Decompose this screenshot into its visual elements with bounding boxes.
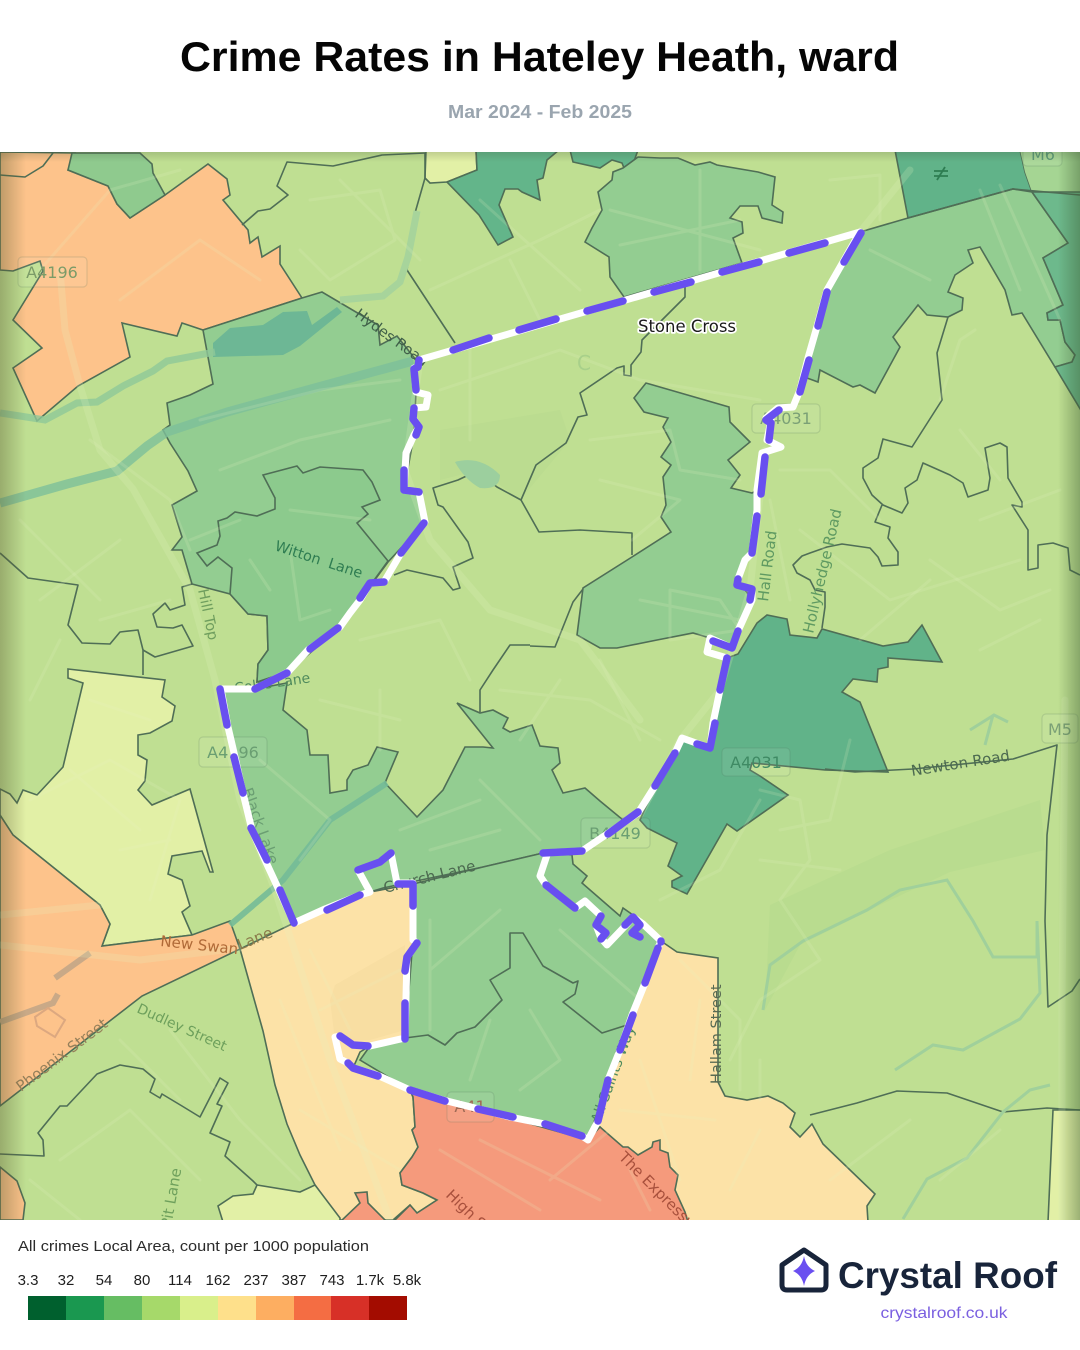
label: The Express: The Expressway [614, 1147, 714, 1247]
area: north-east mid green [807, 189, 1075, 393]
area: Witton north [163, 292, 425, 682]
chip: A4031 north: A4031 [760, 409, 812, 428]
label: Pit Lane: Pit Lane [157, 1167, 185, 1229]
area: salmon south [393, 1090, 688, 1222]
label: Coles Lane: Coles Lane [233, 670, 311, 697]
legend value labels: 3.3 [18, 1272, 38, 1289]
chip: A4196 south: A4196 [207, 743, 259, 762]
water: canals and lake [0, 211, 1050, 1219]
place label: Stone Cross: Stone Cross [638, 317, 736, 336]
chip: A4031 south: A4031 [730, 753, 782, 772]
chip: B4149 [581, 818, 650, 848]
ward boundary: Hateley Heath [220, 232, 861, 1140]
legend value labels: 54 [96, 1272, 112, 1289]
legend value labels: 32 [58, 1272, 74, 1289]
area: far-east darker green [1032, 192, 1080, 412]
brand name: Crystal Roof [838, 1255, 1058, 1296]
area: corner orange [0, 1167, 25, 1220]
area: north-east top mid [1020, 150, 1080, 192]
label: Hill Top: Hill Top [194, 588, 221, 642]
chip: B4149: B4149 [589, 824, 641, 843]
label: Dudley Street: Dudley Street [134, 1001, 229, 1055]
chip: A4196 north: A4196 [26, 263, 78, 282]
chip: A41 [447, 1092, 494, 1122]
area: central mid green [577, 383, 757, 648]
label: Church Lane: Church Lane [382, 857, 477, 897]
local-area boundary lines [0, 153, 1080, 1185]
area: top cream [425, 150, 477, 183]
label: Hydes Road: Hydes Road [352, 306, 431, 370]
label: All Saints Way: All Saints Way [589, 1023, 639, 1125]
label: Hall Road: Hall Road [754, 530, 781, 602]
label: Hollyhedge Road: Hollyhedge Road [799, 507, 845, 635]
map edge shading [0, 152, 1080, 1220]
chip: M5 [1042, 714, 1078, 743]
legend value labels: 162 [205, 1272, 231, 1289]
label: Phoenix Street: Phoenix Street [13, 1015, 111, 1095]
label: High Street: High Street [442, 1186, 516, 1258]
legend value labels [18, 1272, 422, 1289]
area: top mid green [585, 157, 783, 297]
area: south centre-west cream [240, 884, 437, 1220]
chip: A4196 south [199, 737, 267, 767]
choropleth areas [0, 150, 1080, 1222]
label: faint C: C [577, 351, 591, 375]
area: salmon small [340, 1192, 387, 1222]
label: Lane: Lane [235, 923, 275, 954]
area: north-east dark green [895, 150, 1032, 218]
park shading [765, 800, 1045, 1010]
title: Crime Rates in Hateley Heath, ward [180, 33, 899, 80]
chip: A41: A41 [454, 1097, 486, 1116]
area: pale south [218, 1185, 340, 1222]
label: Witton Lane: Witton Lane [273, 539, 364, 582]
chip: M6: M6 [1031, 145, 1055, 164]
railway station icon [934, 167, 948, 180]
legend [18, 1238, 422, 1320]
legend value labels: 1.7k [356, 1272, 385, 1289]
legend value labels: 5.8k [393, 1272, 422, 1289]
boundary: white casing [221, 232, 860, 1140]
label: Newton Road: Newton Road [910, 747, 1011, 780]
legend value labels: 237 [243, 1272, 269, 1289]
area: ward south mid green [360, 853, 661, 1140]
area: north-west orange [0, 152, 302, 421]
chip: M6 [1022, 152, 1062, 166]
area: ward south-west mid green [221, 683, 640, 923]
icon: house with star [782, 1250, 826, 1290]
area: south-east cream [588, 941, 875, 1222]
chip: A4196 north [18, 257, 87, 287]
legend value labels: 80 [134, 1272, 150, 1289]
road number labels [18, 140, 1078, 1122]
label: Black Lake: Black Lake [238, 785, 283, 867]
label: New Swan: New Swan [160, 932, 239, 958]
area: Witton Lane [197, 466, 388, 682]
chip: A4031 south [722, 748, 790, 776]
legend value labels: 114 [168, 1272, 192, 1289]
area: top dark green small [570, 150, 638, 168]
legend value labels: 743 [319, 1272, 345, 1289]
area: south-west orange [0, 815, 240, 1106]
area: top dark green [447, 150, 559, 245]
logo: Crystal Roof [782, 1250, 1058, 1322]
website: crystalroof.co.uk [880, 1305, 1009, 1322]
subtitle: date range: Mar 2024 - Feb 2025 [448, 101, 632, 122]
area: north-west green [68, 153, 165, 218]
boundary: purple dashes [220, 233, 861, 1136]
area: far-east pale strip [1048, 1110, 1080, 1222]
legend colour scale [28, 1296, 407, 1320]
area: east dark green [640, 615, 942, 894]
legend value labels: 387 [281, 1272, 307, 1289]
street labels [13, 306, 1011, 1258]
chip: M5: M5 [1048, 720, 1072, 739]
label: Hallam Street: Hallam Street [709, 984, 725, 1084]
area: pale west [0, 669, 213, 946]
road network [0, 170, 1065, 1220]
legend title: All crimes Local Area, count per 1000 population [18, 1238, 369, 1255]
chip: A4031 north [752, 404, 820, 433]
